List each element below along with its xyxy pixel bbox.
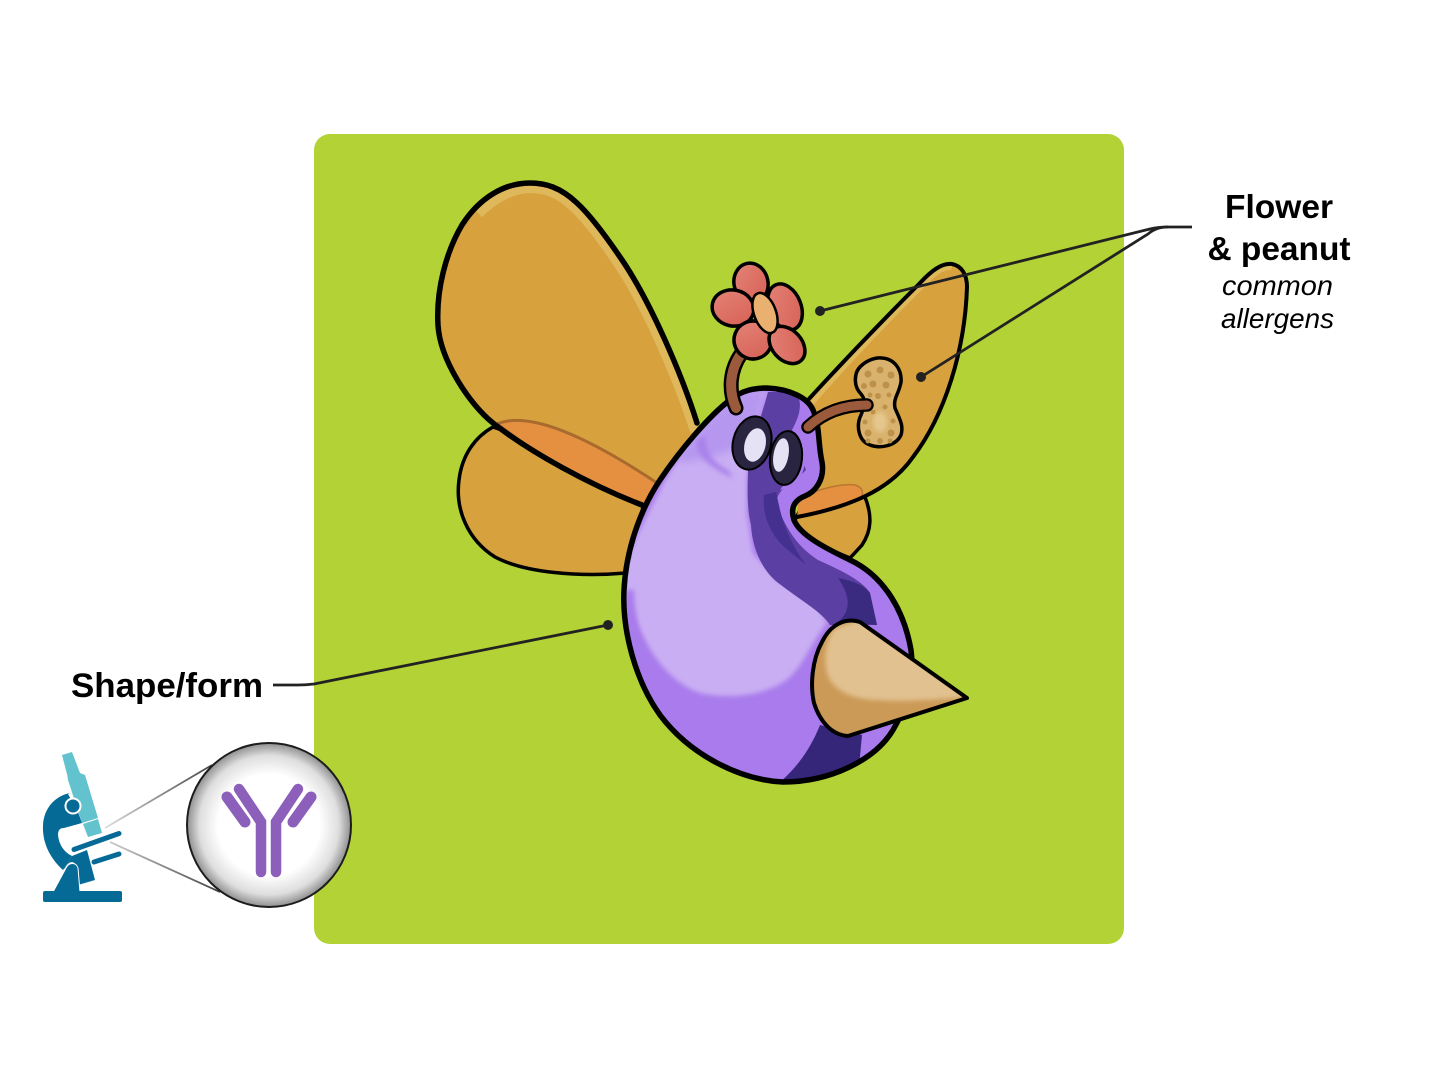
panel: green background <box>314 134 1124 944</box>
lower stripe <box>780 725 862 782</box>
antibody <box>227 789 311 872</box>
label: flower and peanut: allergens <box>1221 303 1334 334</box>
label: flower and peanut: Flower <box>1225 189 1333 226</box>
illustration: allergen bean butterfly <box>438 183 967 782</box>
eye: left <box>727 412 777 474</box>
head tone <box>681 393 764 463</box>
eye: right <box>767 429 805 487</box>
wing: lower left <box>458 427 650 574</box>
cone beak <box>812 620 967 736</box>
peanut stem <box>808 405 867 427</box>
body highlight <box>622 390 827 696</box>
stripe dark core <box>764 492 806 565</box>
leader line: shape/form <box>273 620 613 685</box>
label: flower and peanut: & peanut <box>1208 231 1350 268</box>
label: flower and peanut <box>1208 189 1350 334</box>
head shading <box>697 436 733 478</box>
wing: upper right <box>795 264 967 525</box>
body stripe <box>748 392 877 625</box>
microscope <box>43 752 122 902</box>
wing: upper left <box>438 183 700 510</box>
left edge shade <box>626 588 641 632</box>
magnification rays <box>105 765 220 892</box>
flower stem <box>731 354 741 408</box>
leader lines: flower and peanut <box>815 227 1192 382</box>
icon: microscope with magnified antibody <box>43 743 351 907</box>
right head lilac <box>780 460 804 490</box>
label: flower and peanut: common <box>1222 270 1333 301</box>
wing: lower right <box>795 497 870 558</box>
flower <box>709 260 812 371</box>
magnifying lens <box>187 743 351 907</box>
label: shape/form: Shape/form <box>71 667 263 705</box>
flower center <box>747 290 783 336</box>
peanut <box>855 358 902 447</box>
bean body <box>622 388 912 782</box>
